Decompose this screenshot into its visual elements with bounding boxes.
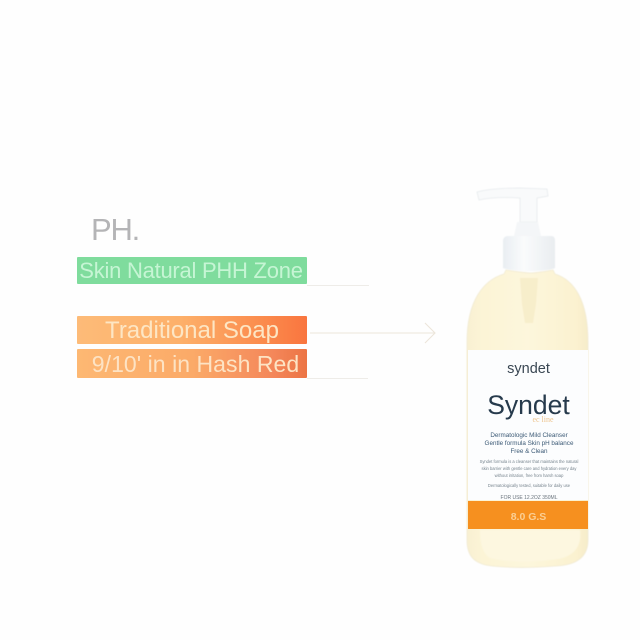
- product label: ec line: [532, 415, 554, 424]
- heading: PH.: PH.: [91, 212, 139, 247]
- product label: without irritation, free from harsh soap: [495, 473, 564, 478]
- product label: Free & Clean: [510, 448, 548, 455]
- product label: Syndet: [487, 390, 570, 420]
- product label: Syndet formula is a cleanser that maintains the natural: [480, 459, 578, 464]
- bottle body: [467, 270, 588, 568]
- label bar: traditional soap: Traditional Soap: [105, 317, 279, 344]
- label orange band: 8.0 G.S: [511, 511, 546, 523]
- product label: [468, 350, 588, 501]
- product label: Dermatologically tested, suitable for daily use: [488, 483, 571, 488]
- product label: skin barrier with gentle care and hydration every day: [482, 466, 577, 471]
- product label: Gentle formula Skin pH balance: [485, 440, 574, 447]
- product label: Dermatologic Mild Cleanser: [490, 432, 568, 439]
- label bar: hash red: 9/10' in in Hash Red: [92, 351, 299, 377]
- arrow: soap pointer: [310, 322, 436, 344]
- label bar: skin natural zone: Skin Natural PHH Zone: [79, 258, 303, 283]
- product label: syndet: [507, 361, 550, 377]
- pump: [477, 188, 555, 271]
- product label: FOR USE 12.2OZ 350ML: [501, 495, 558, 501]
- label orange band: [468, 501, 588, 529]
